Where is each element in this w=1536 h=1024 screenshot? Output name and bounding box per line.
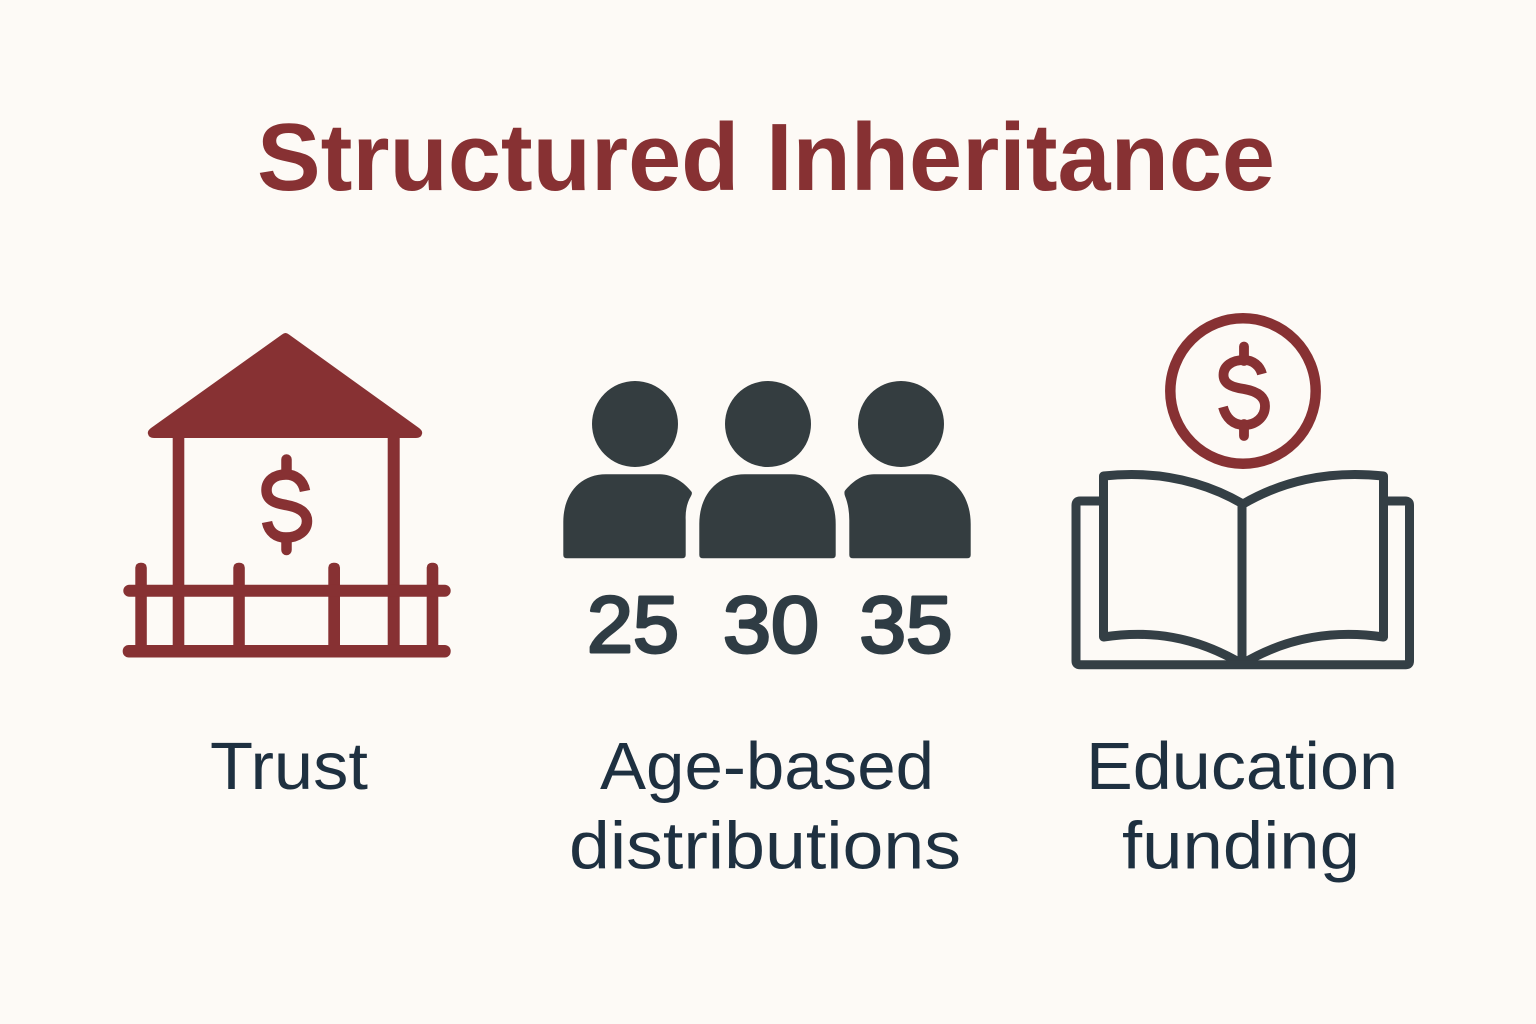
label: Education funding [1086,729,1398,884]
person 2 [699,381,836,558]
label: Age-based distributions: distributions [569,808,961,884]
label: Age-based distributions: Age-based [600,729,934,804]
person 3 [844,381,971,558]
icon: three people with ages [563,381,971,669]
icon: book with coin [1076,318,1410,665]
icon: dollar sign [266,460,307,550]
label: Trust: Trust [210,729,368,804]
icon: coin [1170,318,1316,464]
label: Education funding: Education [1086,729,1398,804]
title: Structured Inheritance [257,104,1275,211]
icon: trust house [123,333,451,658]
person 1 [563,381,692,558]
label: Age-based distributions [569,729,961,884]
icon: open book [1076,474,1410,665]
age 35: 35 [860,580,952,669]
label: Education funding: funding [1122,808,1360,884]
age 25: 25 [587,580,679,669]
age 30: 30 [723,580,819,669]
